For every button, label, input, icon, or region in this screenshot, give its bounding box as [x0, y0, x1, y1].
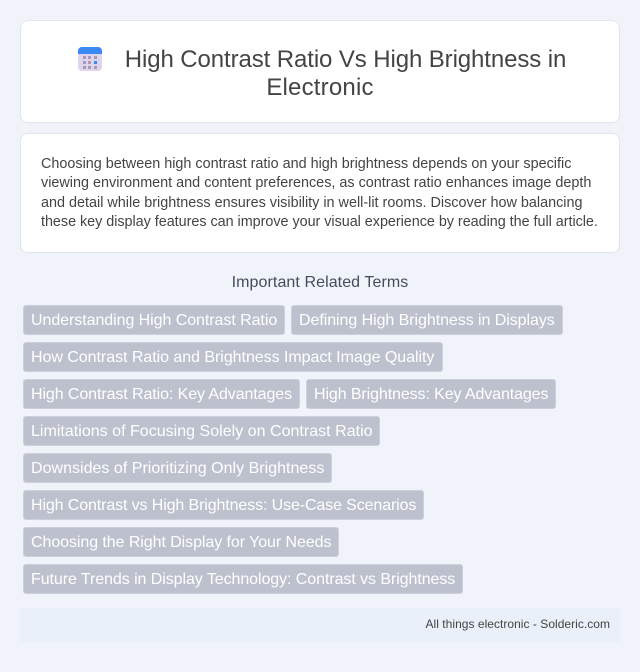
description line 1: Choosing between high contrast ratio and high brightness depends on your specific: [41, 156, 571, 172]
tag 6: Limitations of Focusing Solely on Contrast Ratio: [31, 423, 373, 440]
tag 6: [23, 416, 380, 446]
tag 4: [23, 379, 300, 409]
description line 2: viewing environment and content preferences, as contrast ratio enhances image depth: [41, 175, 591, 191]
description line 4: these key display features can improve your visual experience by reading the full article.: [41, 214, 598, 230]
title line 1: High Contrast Ratio Vs High Brightness in: [125, 46, 566, 73]
tag 4: High Contrast Ratio: Key Advantages: [31, 386, 292, 403]
tag 9: Choosing the Right Display for Your Needs: [31, 534, 331, 551]
tag 8: [23, 490, 424, 520]
description line 3: and detail while brightness ensures visibility in well-lit rooms. Discover how balancing: [41, 195, 582, 211]
title card: [20, 20, 620, 123]
section heading: Important Related Terms: [232, 274, 408, 291]
tag 1: Understanding High Contrast Ratio: [31, 312, 277, 329]
tag 8: High Contrast vs High Brightness: Use-Case Scenarios: [31, 497, 416, 514]
tag 5: [306, 379, 556, 409]
tag 1: [23, 305, 285, 335]
tag 2: Defining High Brightness in Displays: [299, 312, 555, 329]
tag 7: Downsides of Prioritizing Only Brightness: [31, 460, 324, 477]
tag 7: [23, 453, 332, 483]
tag 9: [23, 527, 339, 557]
title line 2: Electronic: [266, 74, 374, 101]
tag 3: [23, 342, 443, 372]
tag 2: [291, 305, 563, 335]
footer credit: All things electronic - Solderic.com: [426, 617, 610, 631]
icon: calendar: [78, 47, 102, 71]
tag 3: How Contrast Ratio and Brightness Impact Image Quality: [31, 349, 434, 366]
description card: [20, 133, 620, 253]
footer bar: [20, 608, 620, 642]
tag 10: [23, 564, 463, 594]
tag list: [23, 305, 563, 594]
tag 10: Future Trends in Display Technology: Contrast vs Brightness: [31, 571, 455, 588]
tag 5: High Brightness: Key Advantages: [314, 386, 548, 403]
